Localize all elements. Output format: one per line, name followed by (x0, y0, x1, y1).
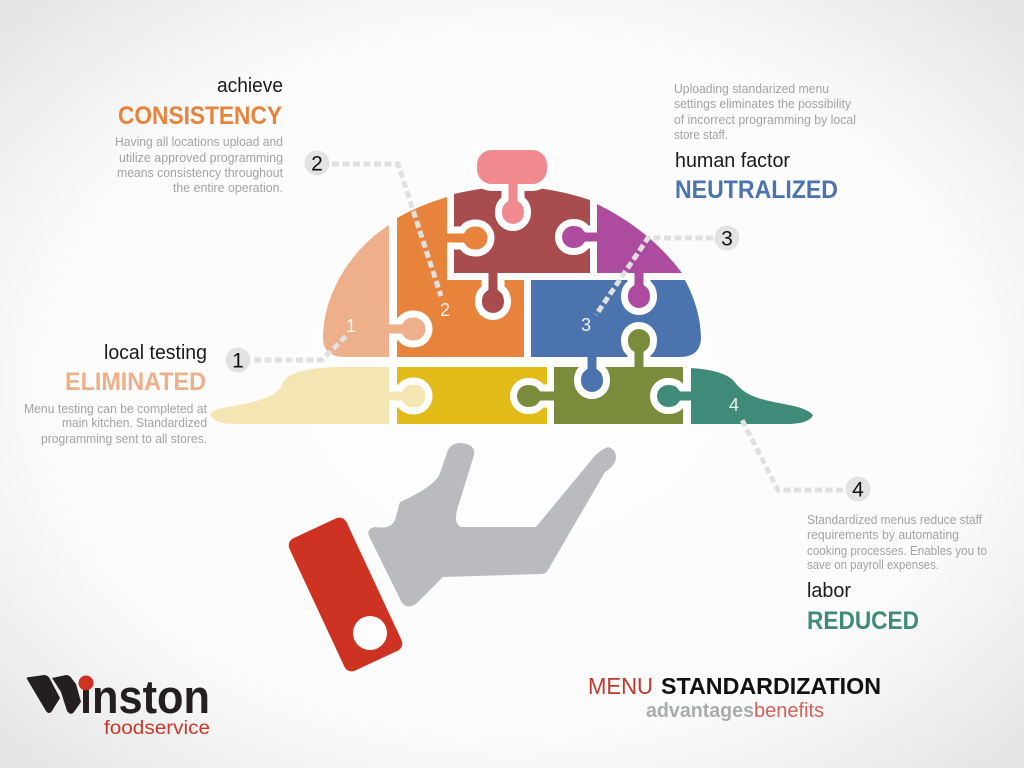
text block: achieve consistency: the entire operation. (173, 181, 283, 195)
text block: human factor neutralized: NEUTRALIZED (675, 176, 838, 204)
text block: local testing eliminated: main kitchen. Standardized (62, 416, 207, 430)
text block: human factor neutralized (674, 82, 856, 204)
tab: peach into orange (388, 318, 426, 340)
text block: labor reduced: requirements by automating (807, 528, 959, 542)
puzzle piece: blue dome (531, 280, 701, 357)
puzzle piece: olive tray (554, 367, 683, 424)
puzzle piece: teal tray right (691, 368, 813, 424)
number badge 2: 2 (311, 152, 323, 176)
logo: Winston foodservice: inston (80, 670, 210, 723)
text block: human factor neutralized: settings eliminates the possibility (674, 97, 852, 111)
puzzle piece: dark red dome top (454, 187, 590, 273)
text block: local testing eliminated: Menu testing can be completed at (24, 402, 208, 416)
text block: achieve consistency: utilize approved programming (119, 151, 283, 165)
tab: dark red into orange (482, 272, 504, 313)
puzzle piece: orange dome (397, 197, 524, 357)
number badge 4 (846, 476, 870, 502)
text block: labor reduced: Standardized menus reduce staff (807, 513, 983, 527)
tab: teal into olive (657, 385, 692, 407)
title: menu standardization: STANDARDIZATION (661, 673, 881, 699)
leader line 1 (254, 335, 347, 360)
puzzle piece: pale yellow tray left (210, 367, 389, 424)
cloche handle: pink puzzle knob (477, 150, 547, 224)
number badge 4: 4 (852, 478, 864, 502)
text block: labor reduced: save on payroll expenses. (807, 558, 939, 572)
tab: pale yellow into yellow (388, 384, 426, 408)
logo: Winston foodservice: foodservice (104, 718, 210, 739)
text block: human factor neutralized: of incorrect programming by local (674, 113, 856, 127)
text block: achieve consistency (115, 75, 284, 195)
text block: labor reduced: labor (807, 580, 851, 602)
tab: olive into blue (628, 329, 650, 368)
text block: local testing eliminated: local testing (104, 342, 207, 364)
title: menu standardization (588, 673, 881, 722)
text block: human factor neutralized: Uploading standarized menu (674, 82, 829, 96)
text block: labor reduced: cooking processes. Enables you to (807, 544, 987, 558)
icon: red cuff (286, 515, 405, 674)
title: menu standardization: MENU (588, 673, 653, 699)
piece number 2: 2 (440, 300, 450, 320)
icon: waiter hand (368, 443, 616, 606)
text block: local testing eliminated: ELIMINATED (65, 368, 206, 396)
piece number 4: 4 (729, 395, 739, 415)
text block: achieve consistency: achieve (217, 75, 283, 97)
text block: human factor neutralized: human factor (675, 150, 790, 172)
tab: blue into olive (581, 356, 603, 392)
puzzle piece: peach dome left (323, 225, 389, 357)
number badge 1: 1 (232, 350, 244, 372)
text block: local testing eliminated: programming sent to all stores. (41, 432, 207, 446)
tab: purple into dark red (562, 226, 598, 248)
text block: local testing eliminated (24, 342, 208, 446)
logo: Winston foodservice (27, 670, 210, 739)
cloche puzzle illustration (210, 150, 813, 424)
number badge 3: 3 (721, 228, 733, 250)
number badge 1 (226, 348, 250, 372)
text block: labor reduced: REDUCED (807, 607, 919, 635)
text block: labor reduced (807, 513, 987, 635)
leader line 4 (741, 418, 843, 490)
tab: olive into yellow (517, 385, 555, 407)
tab: orange into dark red (446, 226, 488, 250)
leader line 3 (596, 238, 713, 315)
piece number 3: 3 (581, 315, 591, 335)
text block: achieve consistency: means consistency throughout (117, 166, 284, 180)
title: menu standardization: benefits (754, 700, 824, 722)
leader line 2 (332, 164, 441, 296)
number badge 2 (304, 150, 330, 176)
text block: achieve consistency: Having all locations upload and (115, 135, 283, 149)
text block: achieve consistency: CONSISTENCY (118, 102, 282, 130)
text block: human factor neutralized: store staff. (674, 128, 728, 142)
piece number 1: 1 (346, 316, 356, 336)
tab: purple into blue (628, 272, 650, 308)
title: menu standardization: advantages (646, 700, 754, 722)
puzzle piece: yellow tray (397, 367, 547, 424)
puzzle piece: purple dome (597, 204, 682, 273)
number badge 3 (714, 226, 740, 250)
